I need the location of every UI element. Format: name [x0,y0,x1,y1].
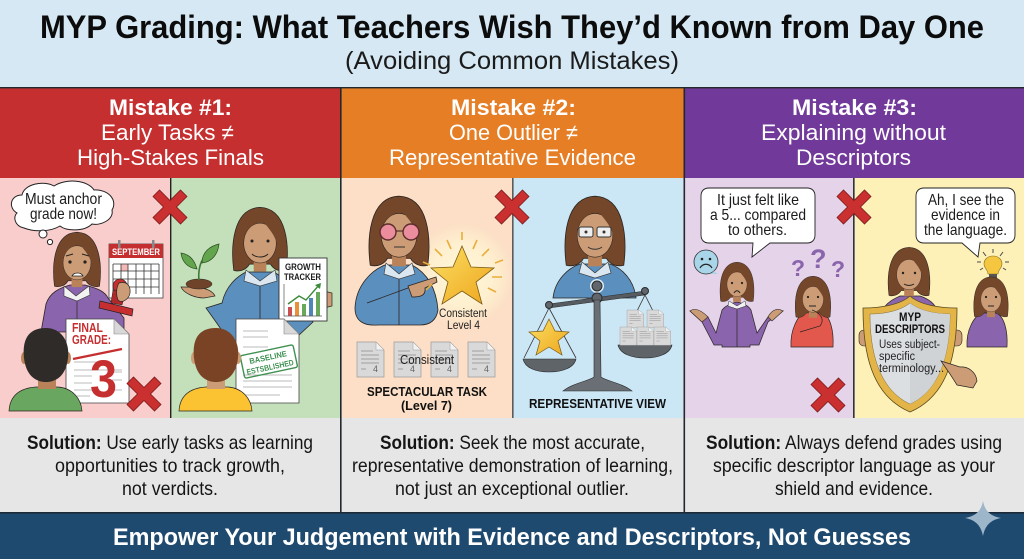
speech bubble: Ah, I see the [928,192,1004,209]
document row: 4 [447,364,452,374]
solution 1 [27,432,313,500]
final grade paper: GRADE: [72,332,111,347]
descriptors shield: MYP [899,310,921,324]
icon: gold star [423,232,503,304]
panel: solution strip [0,418,1024,513]
icon: lightbulb [977,249,1009,279]
label: spectacular task: (Level 7) [401,398,452,413]
descriptors shield [859,296,962,412]
balance scale [523,281,672,391]
speech bubble [916,188,1015,257]
label: spectacular task: SPECTACULAR TASK [367,384,488,399]
panel: mistake 3 header: Mistake #3: [792,95,917,120]
speech bubble: the language. [924,222,1007,239]
baseline paper [236,319,299,403]
footer banner: Empower Your Judgement with Evidence and Descriptors, Not Guesses [113,524,911,551]
panel: mistake 3 header [685,88,1024,178]
solution 3: specific descriptor language as your [713,455,995,477]
final grade paper: FINAL [72,320,103,335]
panel: mistake 1 header [0,88,340,178]
teacher with rose glasses [355,196,438,325]
panel: descriptors right scene [855,178,1024,419]
label: consistent level 4: Consistent [439,308,488,320]
thought bubble [11,181,114,245]
panel: outlier right scene [513,178,683,419]
solution 1: Solution: Use early tasks as learning [27,432,313,454]
subtitle: (Avoiding Common Mistakes) [345,47,679,75]
teacher shrugging [690,262,783,347]
growth tracker chart: GROWTH [285,262,321,272]
panel: mistake 2 header: Mistake #2: [451,95,576,120]
label: consistent level 4: Level 4 [447,320,481,332]
teacher behind shield [883,247,937,310]
panel: mistake 2 header: Representative Evidence [389,145,636,170]
panel: early task wrong scene [0,178,170,419]
panel: mistake 1 header: Early Tasks ≠ [101,120,234,145]
speech bubble: a 5... compared [710,207,806,224]
descriptors shield: specific [879,351,915,363]
star glow [410,223,514,327]
solution 3: Solution: Always defend grades using [706,432,1002,454]
title: MYP Grading: What Teachers Wish They’d Known from Day One [40,9,984,45]
panel: mistake 3 header: Explaining without [761,120,947,145]
student thinking [967,277,1008,347]
pointing hand [941,361,977,388]
final grade paper: 3 [90,350,117,409]
solution 3 [706,432,1002,500]
solution 1: not verdicts. [122,478,218,500]
thought bubble: grade now! [30,206,97,223]
question marks: ? [831,256,845,282]
descriptors shield: DESCRIPTORS [875,322,945,336]
calendar [109,240,163,298]
label: representative view: REPRESENTATIVE VIEW [529,396,667,411]
label: spectacular task [367,384,488,413]
grade stamp [99,279,133,316]
solution 2: not just an exceptional outlier. [395,478,629,500]
icon: cross [153,190,187,224]
document row: 4 [373,364,378,374]
stack of documents [620,310,671,345]
document row: 4 [484,364,489,374]
speech bubble: to others. [728,222,787,239]
speech bubble: It just felt like [717,192,799,209]
baseline paper: BASELINE [249,349,288,366]
panel: early task right scene [171,178,340,419]
question marks: ? [791,255,805,281]
calendar: SEPTEMBER [112,247,160,258]
icon: cross [837,190,871,224]
icon: star on pan [529,319,569,355]
solution 2 [352,432,673,500]
teacher with sapling [206,207,313,345]
solution 1: opportunities to track growth, [55,455,285,477]
thought bubble: Must anchor [25,191,103,208]
icon: cross [495,190,529,224]
growth tracker chart [279,258,332,321]
panel: mistake 2 header [341,88,684,178]
speech bubble: evidence in [931,207,1000,224]
sapling in hand [181,244,219,298]
teacher with glasses [553,196,636,298]
student dark hair [9,328,82,411]
panel: mistake 1 header: Mistake #1: [109,95,232,120]
panel: mistake 3 header: Descriptors [796,145,911,170]
footer banner [0,512,1024,559]
document row: 4 [410,364,415,374]
icon: cross [127,377,161,411]
solution 2: Solution: Seek the most accurate, [380,432,645,454]
solution 2: representative demonstration of learning, [352,455,673,477]
icon: cross [811,378,845,412]
panel: outlier wrong scene [342,178,514,419]
descriptors shield: terminology... [879,363,944,375]
descriptors shield: Uses subject- [879,339,940,351]
question marks: ? [810,244,826,274]
label: consistent level 4 [439,308,488,332]
student brown hair [179,328,252,411]
title band [0,0,1024,88]
document row [357,342,495,377]
panel: descriptors wrong scene [685,178,854,419]
baseline paper: ESTSBLISHED [246,358,295,377]
icon: sad face [694,250,718,274]
question marks [791,244,845,282]
document row: Consistent [400,353,454,367]
teacher stressed [41,232,124,332]
speech bubble [701,188,815,257]
icon: sparkle [965,501,1001,536]
panel: mistake 1 header: High-Stakes Finals [77,145,264,170]
student confused [791,276,833,347]
panel: mistake 2 header: One Outlier ≠ [449,120,578,145]
growth tracker chart: TRACKER [284,272,321,282]
final grade paper [66,319,129,409]
solution 3: shield and evidence. [775,478,933,500]
